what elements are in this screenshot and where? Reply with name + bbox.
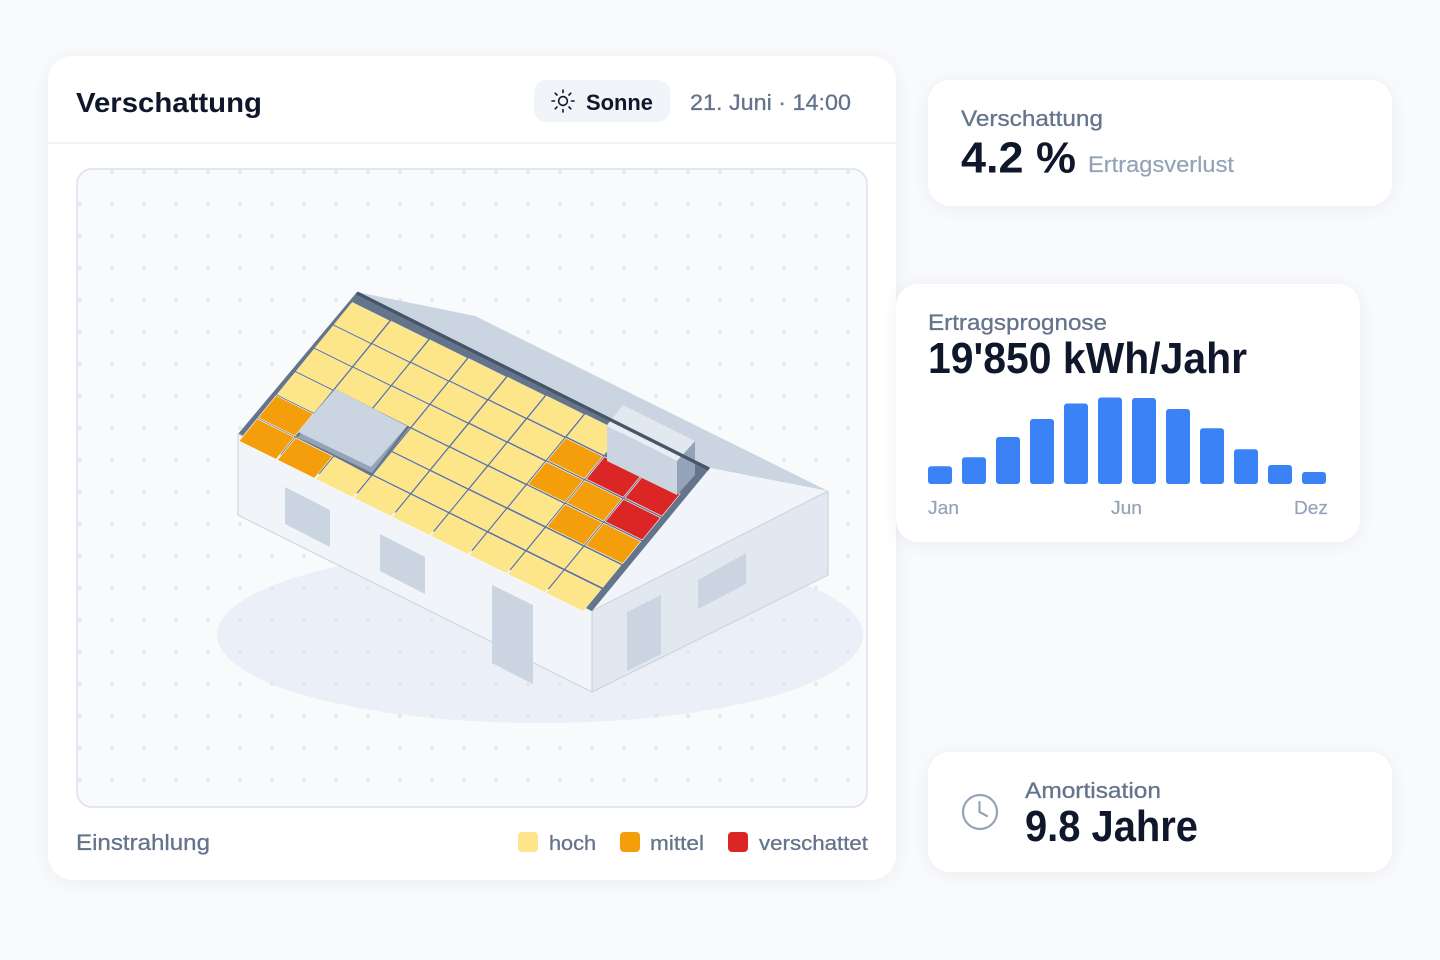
roof slab <box>238 292 710 611</box>
door <box>492 585 533 684</box>
window: front left <box>285 487 330 547</box>
legend item: mittel: mittel <box>650 833 704 855</box>
door: side wall <box>627 595 661 671</box>
legend title: Einstrahlung <box>76 830 210 855</box>
rooftop box <box>607 405 695 495</box>
panel: payback card <box>928 752 1392 872</box>
window: front middle <box>380 534 425 594</box>
gable top <box>592 468 828 611</box>
window: side wall <box>698 553 746 609</box>
legend item: verschattet: verschattet <box>759 833 868 855</box>
house <box>238 292 828 692</box>
stat note: Ertragsverlust <box>1088 152 1234 177</box>
panel: yield forecast card <box>896 284 1360 542</box>
badge: Sonne <box>534 80 670 122</box>
stat value: 4.2 % <box>961 134 1076 183</box>
legend item: hoch <box>518 832 596 855</box>
solar panel array <box>239 302 680 611</box>
side wall <box>592 491 828 692</box>
payback label: Amortisation <box>1025 778 1161 803</box>
axis labels: Jan <box>928 498 959 518</box>
axis labels: Dez <box>1294 498 1328 518</box>
roof ridge line <box>357 293 709 469</box>
legend row <box>76 830 868 855</box>
forecast value: 19'850 kWh/Jahr <box>928 334 1247 383</box>
legend item: mittel <box>620 832 704 855</box>
panel: main shading card <box>48 56 896 880</box>
bar chart: monthly yield <box>928 398 1326 484</box>
panel: shading stat card <box>928 80 1392 206</box>
icon: clock <box>963 795 997 829</box>
axis labels: Jun <box>1111 498 1142 518</box>
panel: roof illustration <box>77 169 867 807</box>
icon: sun <box>552 90 574 112</box>
front wall <box>238 434 592 692</box>
legend item: hoch: hoch <box>549 833 596 855</box>
skylight <box>296 389 410 476</box>
stat label: Verschattung <box>961 106 1103 131</box>
legend item: verschattet <box>728 832 868 855</box>
payback value: 9.8 Jahre <box>1025 802 1198 851</box>
badge label: Sonne <box>586 90 653 115</box>
axis labels <box>928 498 1328 518</box>
forecast label: Ertragsprognose <box>928 310 1107 335</box>
rear roof plane <box>357 292 828 491</box>
date and time: 21. Juni · 14:00 <box>690 90 851 115</box>
ground shadow <box>217 547 863 723</box>
heading: Verschattung: Verschattung <box>76 87 262 118</box>
